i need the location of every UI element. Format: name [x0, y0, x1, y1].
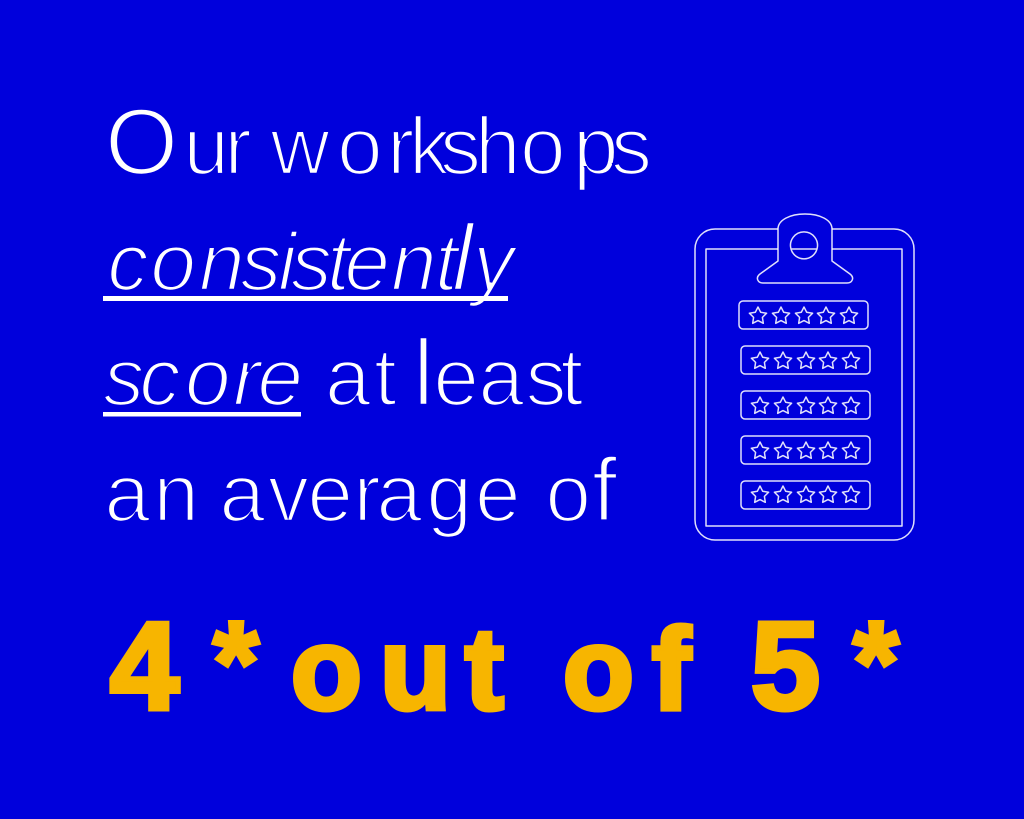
- words: an average of: average: [219, 448, 521, 539]
- underline: score: [103, 412, 301, 416]
- word: at: at: [325, 332, 397, 423]
- rating row 5: [741, 481, 870, 509]
- word: out: out: [291, 604, 504, 734]
- asterisk: *: [853, 597, 899, 729]
- clip hole: [791, 232, 818, 259]
- heading text: [103, 89, 652, 541]
- word: score: score: [103, 332, 303, 423]
- underline: consistently: [103, 296, 508, 301]
- rating row 4: [741, 436, 870, 464]
- word: workshops: workshops: [270, 101, 652, 192]
- rating row 2: [741, 346, 870, 374]
- clipboard inner sheet: [706, 249, 902, 526]
- words: an average of: [104, 441, 618, 541]
- rating row 1: [739, 301, 868, 329]
- number 5: 5: [751, 598, 820, 736]
- rating row 3: [741, 391, 870, 419]
- word: of: of: [563, 604, 691, 734]
- asterisk: *: [213, 597, 259, 729]
- clip: [757, 214, 853, 283]
- number 4: 4: [110, 598, 179, 736]
- score headline: 4* out of 5*: [110, 597, 899, 736]
- words: an average of: of: [545, 441, 618, 541]
- word: Our: Our: [105, 89, 252, 194]
- icon: clipboard with star ratings: [695, 214, 914, 540]
- word: least: least: [413, 320, 584, 425]
- word: consistently: consistently: [107, 205, 519, 310]
- words: an average of: an: [104, 448, 199, 539]
- clipboard outer board: [695, 229, 914, 540]
